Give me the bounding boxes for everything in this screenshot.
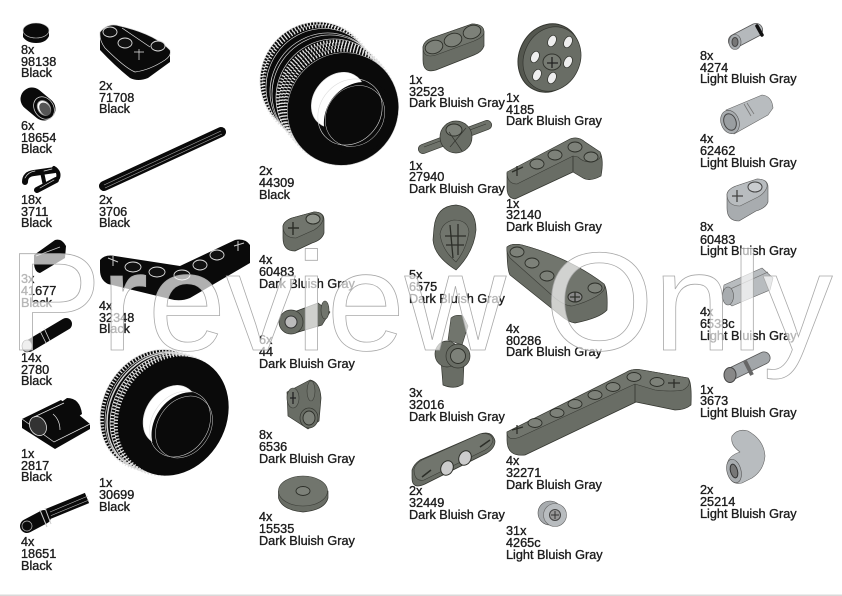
label: 8x [700,49,714,63]
label: 2x [700,483,714,497]
label: 6538c [700,317,735,331]
label: 14x [21,351,42,365]
part: 3711 [21,168,58,230]
label: Black [21,470,53,484]
label: 3706 [99,205,127,219]
part: 98138 [21,23,56,80]
label: Light Bluish Gray [506,548,603,562]
icon: bent black beam [100,240,250,300]
label: Black [259,188,291,202]
label: Dark Bluish Gray [259,534,356,548]
icon: half bush [538,501,566,526]
label: 2x [99,193,113,207]
part: 41677 [21,240,66,310]
label: 4265c [506,536,541,550]
label: 5x [409,268,423,282]
icon: plate with holes [22,398,90,449]
icon: round tile with hole [278,476,328,512]
label: 3x [409,386,423,400]
part: 60483 light [700,179,797,258]
label: 30699 [99,488,134,502]
label: 4185 [506,103,534,117]
label: Black [21,216,53,230]
label: Dark Bluish Gray [409,96,506,110]
icon: light cylinder connector [717,95,773,136]
icon: curved triangular beam [507,244,607,323]
icon: light pin [729,26,762,50]
icon: thin beam [34,240,66,273]
part: 32271 [506,369,691,492]
icon: angle connector [435,315,470,387]
label: Black [99,322,131,336]
part: 6575 [409,205,506,306]
label: 1x [506,91,520,105]
label: 4x [506,454,520,468]
label: 44 [259,345,273,359]
label: 2x [99,79,113,93]
icon: light pin long [724,358,764,382]
label: 71708 [99,91,134,105]
label: 18654 [21,131,56,145]
label: Dark Bluish Gray [506,220,603,234]
part: 32348 [99,240,250,336]
label: 1x [506,197,520,211]
label: 3673 [700,394,728,408]
part: 30699 [79,330,250,514]
label: 4274 [700,61,728,75]
label: 32016 [409,398,444,412]
label: 6x [21,119,35,133]
icon: three hole beam [423,23,484,71]
icon: long bent beam [507,369,691,455]
label: Dark Bluish Gray [506,478,603,492]
part: 32016 [409,315,506,424]
icon: chain link [25,168,58,190]
label: 4x [506,322,520,336]
label: 41677 [21,284,56,298]
part: 18651 [21,496,89,573]
part: 44309 [238,0,421,202]
label: 3x [21,272,35,286]
part: 4274 [700,26,797,86]
label: Light Bluish Gray [700,329,797,343]
label: Light Bluish Gray [700,72,797,86]
label: Dark Bluish Gray [259,357,356,371]
icon: round tile [23,23,49,43]
label: Light Bluish Gray [700,156,797,170]
part: 32449 [409,433,506,522]
part: 62462 [700,95,797,170]
label: 1x [409,73,423,87]
label: 4x [99,299,113,313]
part: 18654 [21,93,59,156]
label: 1x [409,159,423,173]
label: 80286 [506,334,541,348]
label: 2x [409,484,423,498]
icon: cross block [287,380,321,429]
label: 1x [700,383,714,397]
part: 2780 [21,324,66,388]
label: Light Bluish Gray [700,244,797,258]
label: 27940 [409,170,444,184]
label: 3711 [21,205,48,219]
label: 1x [99,476,113,490]
icon: technic pin [22,324,66,352]
label: 6536 [259,440,287,454]
label: Light Bluish Gray [700,507,797,521]
label: 60483 [700,233,735,247]
label: 32348 [99,311,134,325]
label: 2x [259,164,273,178]
icon: gray cam [433,205,476,270]
part: 80286 [506,244,607,359]
icon: short gray beam [283,212,324,251]
label: Black [21,374,53,388]
part: 15535 [259,476,356,548]
label: 6575 [409,280,437,294]
label: 18651 [21,547,56,561]
icon: bush cylinder [29,93,59,123]
icon: small tire [79,330,250,496]
icon: light elbow [724,430,765,484]
label: Dark Bluish Gray [259,452,356,466]
label: Dark Bluish Gray [409,182,506,196]
label: Light Bluish Gray [700,406,797,420]
icon: large tire [238,0,421,187]
icon: L beam [507,138,602,199]
label: 4x [259,510,273,524]
icon: axle with ball joint [423,121,487,153]
label: Black [99,216,131,230]
part: 32140 [506,138,603,234]
label: 4x [700,132,714,146]
label: Dark Bluish Gray [409,292,506,306]
label: 2817 [21,459,49,473]
label: Black [99,102,131,116]
part: 2817 [21,398,90,484]
label: 32271 [506,466,541,480]
label: Dark Bluish Gray [259,277,356,291]
part: 6538c [700,268,797,343]
watermark: Preview Only [8,223,833,380]
label: 4x [700,305,714,319]
label: 15535 [259,522,294,536]
label: 32140 [506,208,541,222]
label: 1x [21,447,35,461]
label: 32449 [409,496,444,510]
icon: pin with axle [22,496,89,531]
icon: black triangular beam [100,25,170,80]
icon: thin four hole beam [412,433,495,486]
label: 2780 [21,363,49,377]
part: 27940 [409,121,506,196]
part: 32523 [409,23,506,110]
label: Black [99,500,131,514]
label: Black [21,559,53,573]
icon: pin connector [279,301,330,334]
icon: long axle [104,131,222,188]
part: 60483 dark [259,212,356,291]
label: 31x [506,524,527,538]
label: 8x [259,428,273,442]
label: 8x [21,43,35,57]
part: 44 dark connector [259,301,356,371]
part: 4265c [506,501,603,562]
label: 4x [259,253,273,267]
part: 3673 [700,358,797,420]
icon: light axle connector [722,268,773,306]
label: 44309 [259,176,294,190]
label: Dark Bluish Gray [409,508,506,522]
label: 98138 [21,55,56,69]
label: 60483 [259,265,294,279]
part: 3706 [99,131,222,230]
label: 18x [21,193,42,207]
label: 32523 [409,85,444,99]
icon: wheel [507,14,591,102]
label: Black [21,66,53,80]
part: 6536 [259,380,356,466]
label: Dark Bluish Gray [409,410,506,424]
label: 4x [21,535,35,549]
label: Black [21,142,53,156]
label: 8x [700,220,714,234]
part: 4185 [506,14,603,128]
label: 25214 [700,495,735,509]
label: Black [21,296,53,310]
label: Dark Bluish Gray [506,114,603,128]
label: 6x [259,333,273,347]
icon: light short beam [727,179,768,221]
part: 71708 [99,25,170,116]
label: 62462 [700,144,735,158]
page footer strip [0,594,842,596]
label: Dark Bluish Gray [506,345,603,359]
part: 25214 [700,430,797,521]
